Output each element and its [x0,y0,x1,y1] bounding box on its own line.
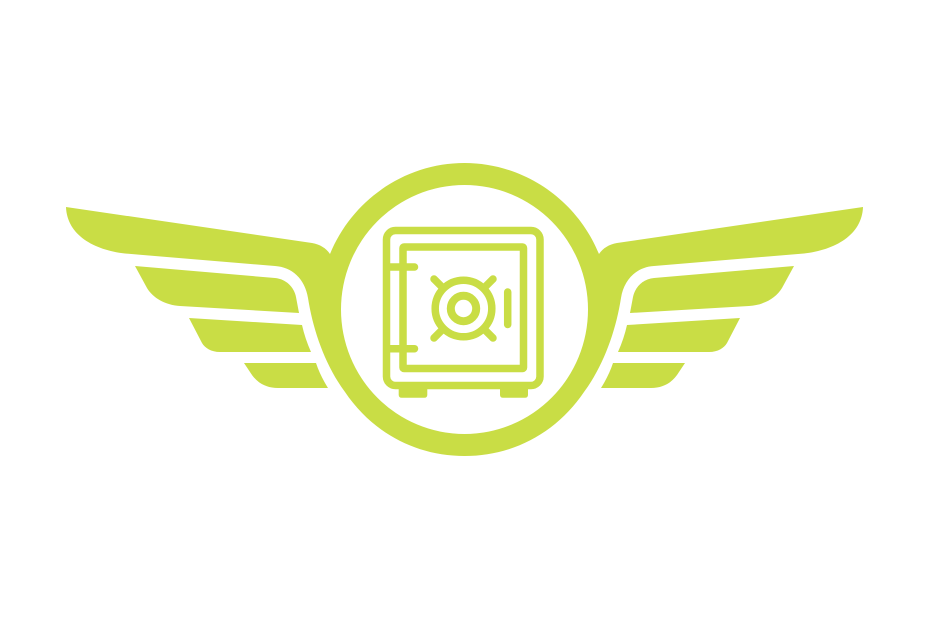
left wing lower feathers [135,266,328,388]
icon: safe [386,230,540,386]
safe body [386,230,540,386]
combination dial [434,279,493,338]
ring with top wing feathers [66,163,863,456]
door handle [504,292,511,324]
door hinges [390,267,414,349]
right wing lower feathers [601,266,794,388]
safe door [403,247,524,368]
safe feet [399,388,528,398]
